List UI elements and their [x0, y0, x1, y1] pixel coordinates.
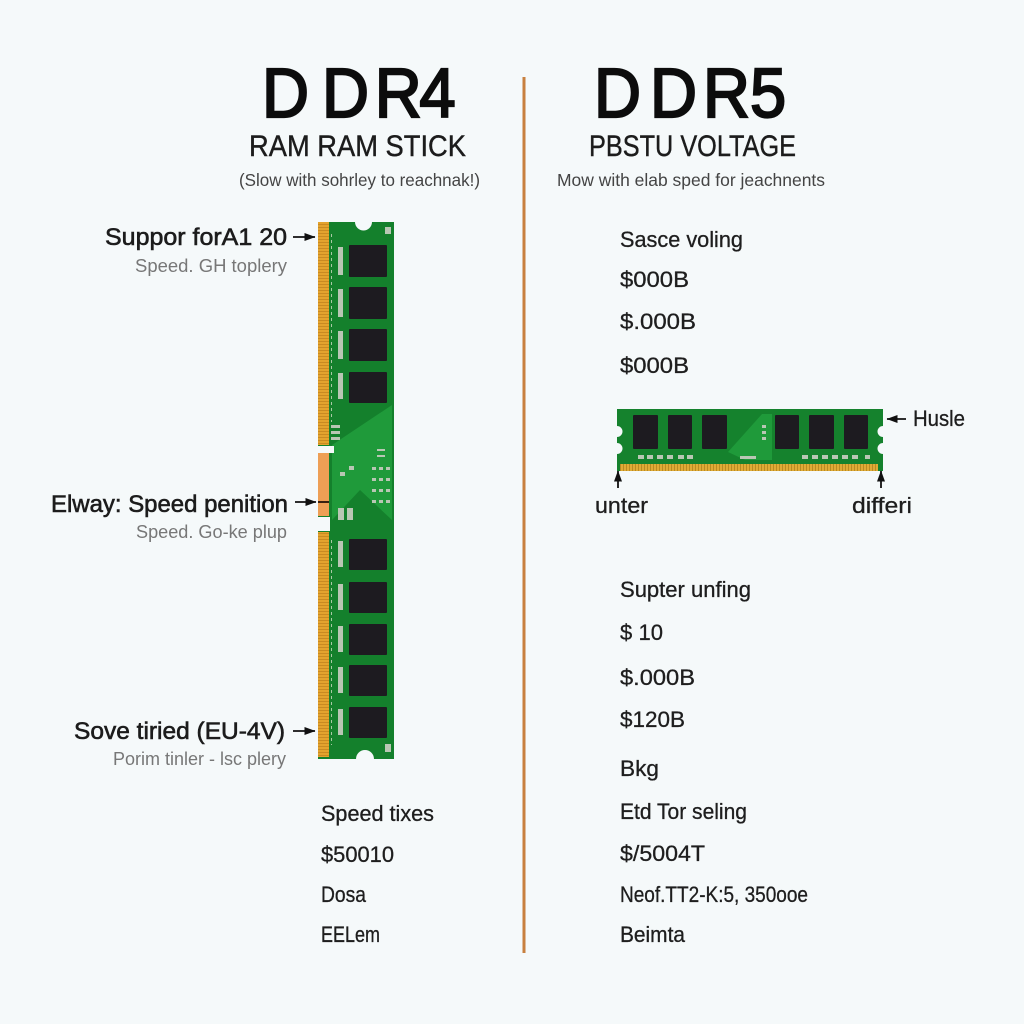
horizontal DDR5 RAM stick [617, 409, 883, 471]
title: DDR5: DDR5 [594, 55, 786, 133]
description: DDR5: Mow with elab sped for jeachnents [557, 170, 825, 190]
callout: bottom DDR4 label [74, 718, 286, 769]
DDR5 spec list: bottom [620, 577, 808, 947]
DDR5 spec list: bottom: Etd Tor seling [620, 799, 747, 824]
DDR4 spec list [321, 801, 434, 947]
subtitle: DDR5: PBSTU VOLTAGE [589, 130, 796, 163]
gold contact strip [620, 464, 878, 471]
label: Husle: Husle [913, 406, 965, 431]
callout: middle DDR4 label: Speed. Go-ke plup [136, 522, 287, 542]
gold contact fingers [318, 222, 334, 757]
PCB board [318, 222, 394, 759]
arrow: Husle callout [887, 418, 906, 420]
DDR4 spec list: Dosa [321, 882, 367, 907]
callout: middle DDR4 label: Elway: Speed penition [51, 491, 288, 518]
arrow: middle DDR4 callout [295, 501, 316, 503]
DDR4 spec list: EELem [321, 922, 380, 947]
arrow: bottom DDR4 callout [293, 730, 315, 732]
callout: top DDR4 label [105, 224, 287, 276]
DDR5 spec list: top: $.000B [620, 309, 696, 334]
callout: bottom DDR4 label: Porim tinler - lsc plery [113, 749, 286, 769]
surface-mount components [638, 425, 870, 459]
DDR5 spec list: bottom: Supter unfing [620, 577, 751, 602]
DDR4 spec list: $50010 [321, 842, 394, 867]
vertical DDR4 RAM stick [318, 222, 394, 759]
PCB board [617, 409, 883, 471]
callout: middle DDR4 label [51, 491, 288, 542]
DDR5 spec list: top: Sasce voling [620, 227, 743, 252]
DDR5 spec list: bottom: $120B [620, 707, 685, 732]
description: DDR4: (Slow with sohrley to reachnak!) [239, 170, 480, 190]
arrow: unter callout [617, 471, 619, 488]
arrow: differi callout [880, 471, 882, 488]
divider between DDR4 and DDR5 [522, 77, 526, 953]
callout: top DDR4 label: Suppor forA1 20 [105, 224, 287, 251]
DDR5 spec list: top [620, 227, 743, 378]
DDR5 spec list: bottom: $/5004T [620, 841, 705, 866]
DDR5 spec list: bottom: $ 10 [620, 620, 663, 645]
memory chips [633, 415, 868, 449]
callout: top DDR4 label: Speed. GH toplery [135, 256, 287, 276]
memory chips [349, 245, 387, 738]
DDR5 spec list: bottom: Neof.TT2-K:5, 350ooe [620, 882, 808, 907]
surface-mount components [331, 227, 391, 752]
title: DDR4: DDR4 [262, 55, 456, 133]
DDR4 spec list: Speed tixes [321, 801, 434, 826]
label: unter: unter [595, 493, 648, 518]
callout: bottom DDR4 label: Sove tiried (EU-4V) [74, 718, 285, 745]
subtitle: DDR4: RAM RAM STICK [249, 130, 466, 163]
DDR5 spec list: bottom: $.000B [620, 665, 695, 690]
DDR5 spec list: top: $000B [620, 267, 689, 292]
DDR5 spec list: bottom: Beimta [620, 922, 686, 947]
DDR5 spec list: bottom: Bkg [620, 756, 659, 781]
arrow: top DDR4 callout [293, 236, 315, 238]
label: differi: differi [852, 493, 912, 518]
DDR5 spec list: top: $000B [620, 353, 689, 378]
